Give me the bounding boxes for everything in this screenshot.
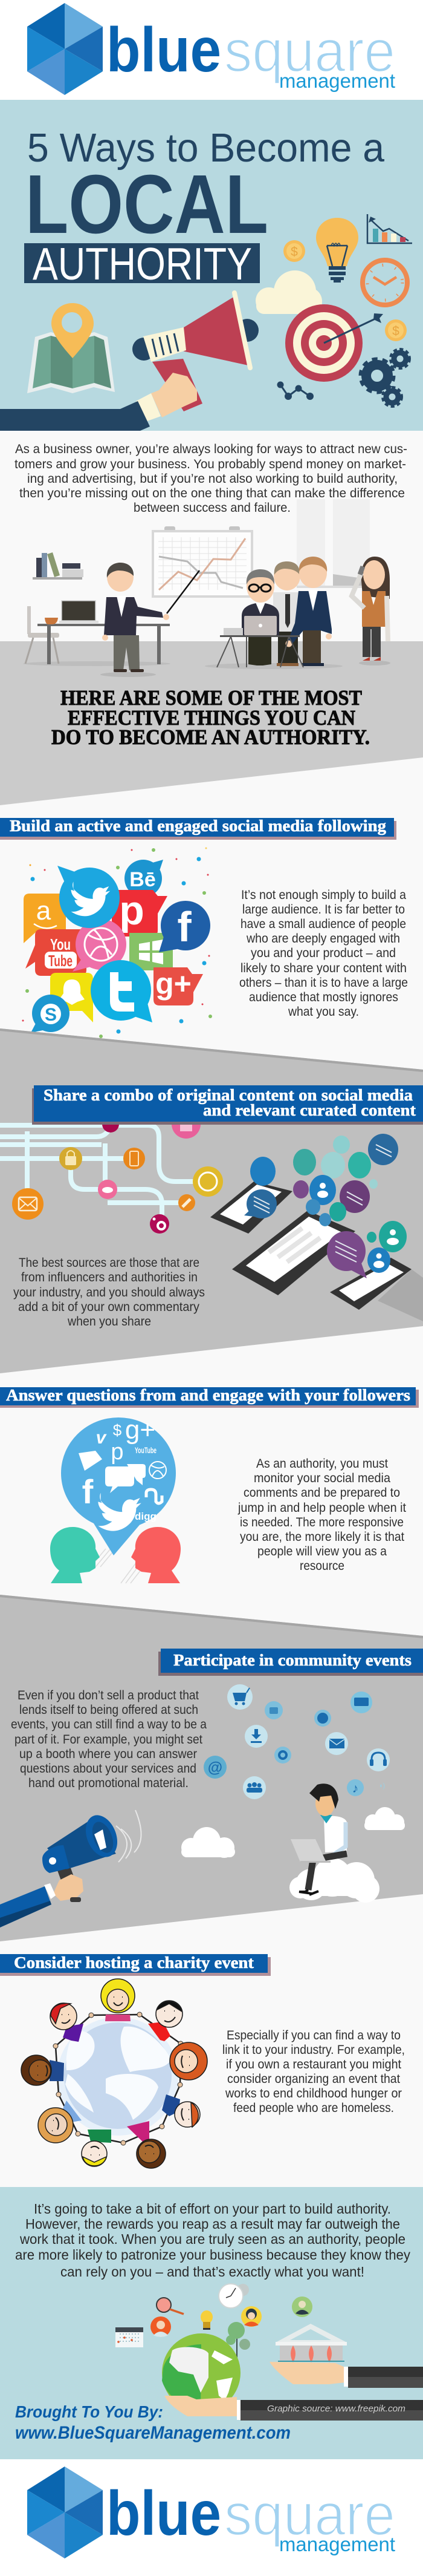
icon: coin: $ (291, 245, 298, 259)
header logo (0, 0, 423, 100)
facebook bubble (159, 901, 210, 952)
footer logo (0, 2459, 423, 2576)
behance bubble: Bē (129, 868, 156, 891)
section 4 heading: Participate in community events (173, 1651, 412, 1669)
section 3 paragraph: you are, the more likely it is that (240, 1530, 404, 1544)
section 5 paragraph: link it to your industry. For example, (222, 2043, 405, 2057)
section 2 paragraph: The best sources are those that are (19, 1256, 199, 1270)
team at table (205, 557, 343, 669)
section 5 paragraph: feed people who are homeless. (233, 2101, 394, 2115)
section 4 paragraph (11, 1688, 207, 1790)
youtube bubble: You (50, 935, 71, 953)
section 2 paragraph: add a bit of your own commentary (18, 1300, 199, 1314)
section 5 paragraph (222, 2028, 405, 2115)
globe (57, 2017, 178, 2136)
section 2 heading: and relevant curated content (203, 1101, 416, 1119)
section 1 paragraph: you and your product – and (251, 946, 396, 960)
intro text block: As a business owner, you’re always looking for ways to attract new cus- (15, 442, 407, 456)
closing paragraph: work that it took. When you are truly seen as an authority, people (19, 2231, 405, 2247)
intro text block (15, 442, 407, 515)
network icon nodes (12, 1110, 223, 1234)
section 1 paragraph (239, 888, 408, 1019)
closing paragraph: It’s going to take a bit of effort on your part to build authority. (34, 2201, 391, 2217)
section 3 paragraph: resource (300, 1559, 344, 1573)
footer teal panel (0, 2187, 423, 2459)
section 3 paragraph: jump in and help people when it (237, 1501, 406, 1515)
section 2 paragraph (13, 1256, 205, 1329)
floating service icons (204, 1684, 390, 1799)
pinterest bubble: p (119, 888, 144, 933)
cloud left (181, 1827, 235, 1858)
section 1 paragraph: large audience. It is far better to (242, 903, 405, 917)
title line 1: 5 Ways to Become a (27, 125, 385, 171)
kid heads (21, 1979, 207, 2168)
man in shirt and tie (273, 561, 300, 666)
section 1 heading: Build an active and engaged social media following (10, 817, 387, 835)
brought to you by (15, 2402, 291, 2443)
icon: calendar (115, 2327, 143, 2347)
table legs (217, 636, 303, 667)
section 1 paragraph: what you say. (288, 1005, 359, 1019)
grey band section 2 (0, 1028, 423, 1373)
section 3 heading: Answer questions from and engage with your followers (6, 1386, 410, 1404)
section 2 heading: Share a combo of original content on social media (44, 1086, 413, 1104)
pinterest bubble (112, 888, 167, 937)
section 2 paragraph: your industry, and you should always (13, 1286, 205, 1299)
google plus bubble: g+ (155, 967, 192, 1001)
logo word blue: blue (106, 15, 221, 85)
section 5 heading: Consider hosting a charity event (14, 1953, 254, 1972)
amazon bubble: a (36, 896, 51, 926)
man with laptop on cloud (289, 1783, 379, 1903)
bubble (61, 1415, 176, 1555)
grey band section 4 (0, 1595, 423, 1941)
icon: coin (385, 319, 407, 341)
floating service icons: ♪ (352, 1782, 358, 1796)
graphic source credit: Graphic source: www.freepik.com (267, 2404, 405, 2414)
whiteboard chart (153, 526, 252, 597)
icon: clock (363, 260, 407, 305)
section 4 heading (158, 1649, 423, 1676)
phones with chat bubbles (210, 1134, 412, 1310)
section 4 paragraph: part of it. For example, you might set (15, 1733, 202, 1747)
section 3 paragraph: people will view you as a (257, 1545, 387, 1558)
facebook bubble: f (177, 903, 192, 950)
man in navy jacket (285, 557, 332, 666)
social media bubble cluster (22, 847, 212, 1038)
icon: gears (361, 350, 410, 407)
logo word square: square (224, 18, 395, 84)
closing paragraph (15, 2201, 410, 2280)
icon: hand holding megaphone (0, 293, 259, 431)
section 4 paragraph: lends itself to being offered at such (19, 1703, 198, 1717)
youtube bubble (25, 929, 86, 976)
desk with laptop, cup and chair (23, 601, 170, 666)
linked arms (56, 2015, 181, 2143)
section 2 paragraph: from influencers and authorities in (21, 1270, 198, 1284)
section 2 paragraph: when you share (67, 1315, 151, 1329)
icon: person avatar yellow (241, 2306, 262, 2327)
dribbble bubble (73, 919, 126, 972)
icon: person avatar orange (150, 2316, 171, 2337)
office scene illustration (0, 499, 423, 805)
small phone bottom (330, 1258, 412, 1310)
coral head silhouette (131, 1527, 181, 1583)
section 1 paragraph: have a small audience of people (241, 917, 406, 931)
section 4 paragraph: up a booth where you can answer (19, 1747, 197, 1761)
bubble: p (111, 1439, 124, 1465)
icon: bar chart (367, 214, 412, 243)
tumblr bubble (91, 960, 152, 1022)
icon: blue hexagon cube (27, 2466, 103, 2558)
hero panel (0, 100, 423, 431)
icon: target with arrow (285, 304, 383, 382)
section 4 paragraph: Even if you don’t sell a product that (18, 1688, 199, 1702)
icon: coin: $ (392, 324, 399, 338)
windows bubble (129, 933, 173, 981)
woman on phone (352, 557, 390, 665)
behance bubble (124, 860, 163, 897)
icon: magnifier (157, 2298, 184, 2314)
floating service icons: @ (208, 1759, 222, 1776)
section 3 paragraph: is needed. The more responsive (240, 1515, 404, 1529)
intro text block: tomers and grow your business. You probably spend money on market- (15, 457, 406, 471)
logo word blue: blue (106, 2479, 221, 2549)
speech bubble with two heads (50, 1415, 181, 1583)
bubble: digg (135, 1511, 157, 1522)
shelf with books (33, 552, 83, 580)
logo word management: management (279, 70, 395, 92)
google plus bubble (153, 967, 203, 1005)
closing paragraph: can rely on you – and that’s exactly what you want! (60, 2264, 364, 2280)
section 1 paragraph: others – than it is to have a large (239, 976, 408, 990)
section 3 paragraph: As an authority, you must (256, 1457, 388, 1471)
floating service icons: ◖) (379, 1782, 385, 1790)
icon: cloud (256, 270, 322, 315)
bubble: f (82, 1473, 94, 1511)
kid faces (37, 1997, 190, 2155)
icon: blue hexagon cube (27, 3, 103, 95)
section 3 paragraph (237, 1457, 406, 1573)
intro text block: between success and failure. (134, 501, 291, 515)
intro text block: then you’re missing out on the one thing that can make the difference (19, 486, 405, 500)
presenter with pointer (100, 563, 199, 677)
icon: lightbulb (316, 218, 358, 283)
icon: map with pin (27, 303, 115, 393)
chat bubbles (244, 1134, 407, 1278)
icon: tree (226, 2322, 250, 2363)
icon network lines (0, 1125, 193, 1216)
intro text block: ing and advertising, but if you’re not also working to build authority, (27, 472, 398, 486)
section 1 paragraph: likely to share your content with (241, 961, 407, 975)
section 4 paragraph: questions about your services and (20, 1762, 196, 1776)
confetti dots (22, 847, 212, 1038)
closing paragraph: However, the rewards you reap as a result may far outweigh the (25, 2216, 400, 2232)
title AUTHORITY box: AUTHORITY (33, 238, 252, 289)
hatched background (91, 1549, 148, 1583)
section 2 heading (32, 1085, 423, 1125)
section 4 paragraph: hand out promotional material. (28, 1776, 189, 1790)
hand with blue megaphone (0, 1810, 141, 1927)
seated man with glasses (242, 569, 279, 665)
bubble: $ (113, 1421, 122, 1439)
snapchat bubble (50, 973, 93, 1022)
bubble: v (96, 1428, 108, 1448)
skype bubble (31, 995, 69, 1033)
logo word square: square (224, 2481, 395, 2548)
icon: network nodes (277, 381, 314, 400)
cloud right (364, 1807, 405, 1830)
window (297, 499, 370, 588)
subheading: most effective things: HERE ARE SOME OF THE MOST (60, 686, 362, 710)
icon: hand holding bank building (270, 2324, 423, 2388)
logo word management: management (279, 2533, 395, 2555)
small phone top (210, 1182, 292, 1234)
phone shadow (378, 1269, 423, 1321)
subheading: most effective things (51, 686, 370, 749)
section 1 paragraph: who are deeply engaged with (246, 932, 400, 946)
section 5 paragraph: Especially if you can find a way to (227, 2028, 401, 2042)
section 5 heading (0, 1953, 271, 1976)
hands (53, 2012, 183, 2145)
floor (0, 641, 423, 805)
large phone (232, 1211, 355, 1295)
bubble: YouTube (135, 1445, 157, 1455)
icon: clock (219, 2284, 249, 2308)
section 5 paragraph: consider organizing an event that (227, 2072, 400, 2086)
children around the globe (21, 1979, 207, 2168)
subheading: most effective things: DO TO BECOME AN AUTHORITY. (51, 725, 370, 749)
kid bodies (50, 2015, 180, 2143)
bubble: g+ (125, 1415, 155, 1445)
subheading: most effective things: EFFECTIVE THINGS YOU CAN (68, 706, 355, 730)
title LOCAL: LOCAL (25, 158, 268, 251)
section 3 paragraph: comments and be prepared to (244, 1486, 400, 1500)
section 5 paragraph: if you own a restaurant you might (226, 2058, 401, 2071)
brought to you by: Brought To You By: (15, 2402, 163, 2421)
section 5 paragraph: works to end childhood hunger or (225, 2087, 402, 2100)
icon: person avatar green (292, 2296, 312, 2317)
icon: hand holding green globe (162, 2333, 423, 2421)
skype bubble: S (45, 1005, 57, 1025)
section 4 paragraph: events, you can still find a way to be a (11, 1718, 207, 1731)
teal head silhouette (50, 1527, 100, 1583)
closing paragraph: are more likely to patronize your business because they know they (15, 2247, 410, 2263)
amazon bubble (24, 894, 66, 943)
section 1 paragraph: audience that mostly ignores (249, 990, 398, 1004)
section 3 paragraph: monitor your social media (254, 1471, 390, 1485)
brought to you by: www.BlueSquareManagement.com (15, 2423, 291, 2443)
youtube bubble: Tube (48, 952, 73, 970)
icon: coin (283, 240, 305, 262)
icon: small bulb (201, 2310, 213, 2330)
section 1 paragraph: It’s not enough simply to build a (241, 888, 406, 902)
twitter bubble (57, 866, 120, 928)
